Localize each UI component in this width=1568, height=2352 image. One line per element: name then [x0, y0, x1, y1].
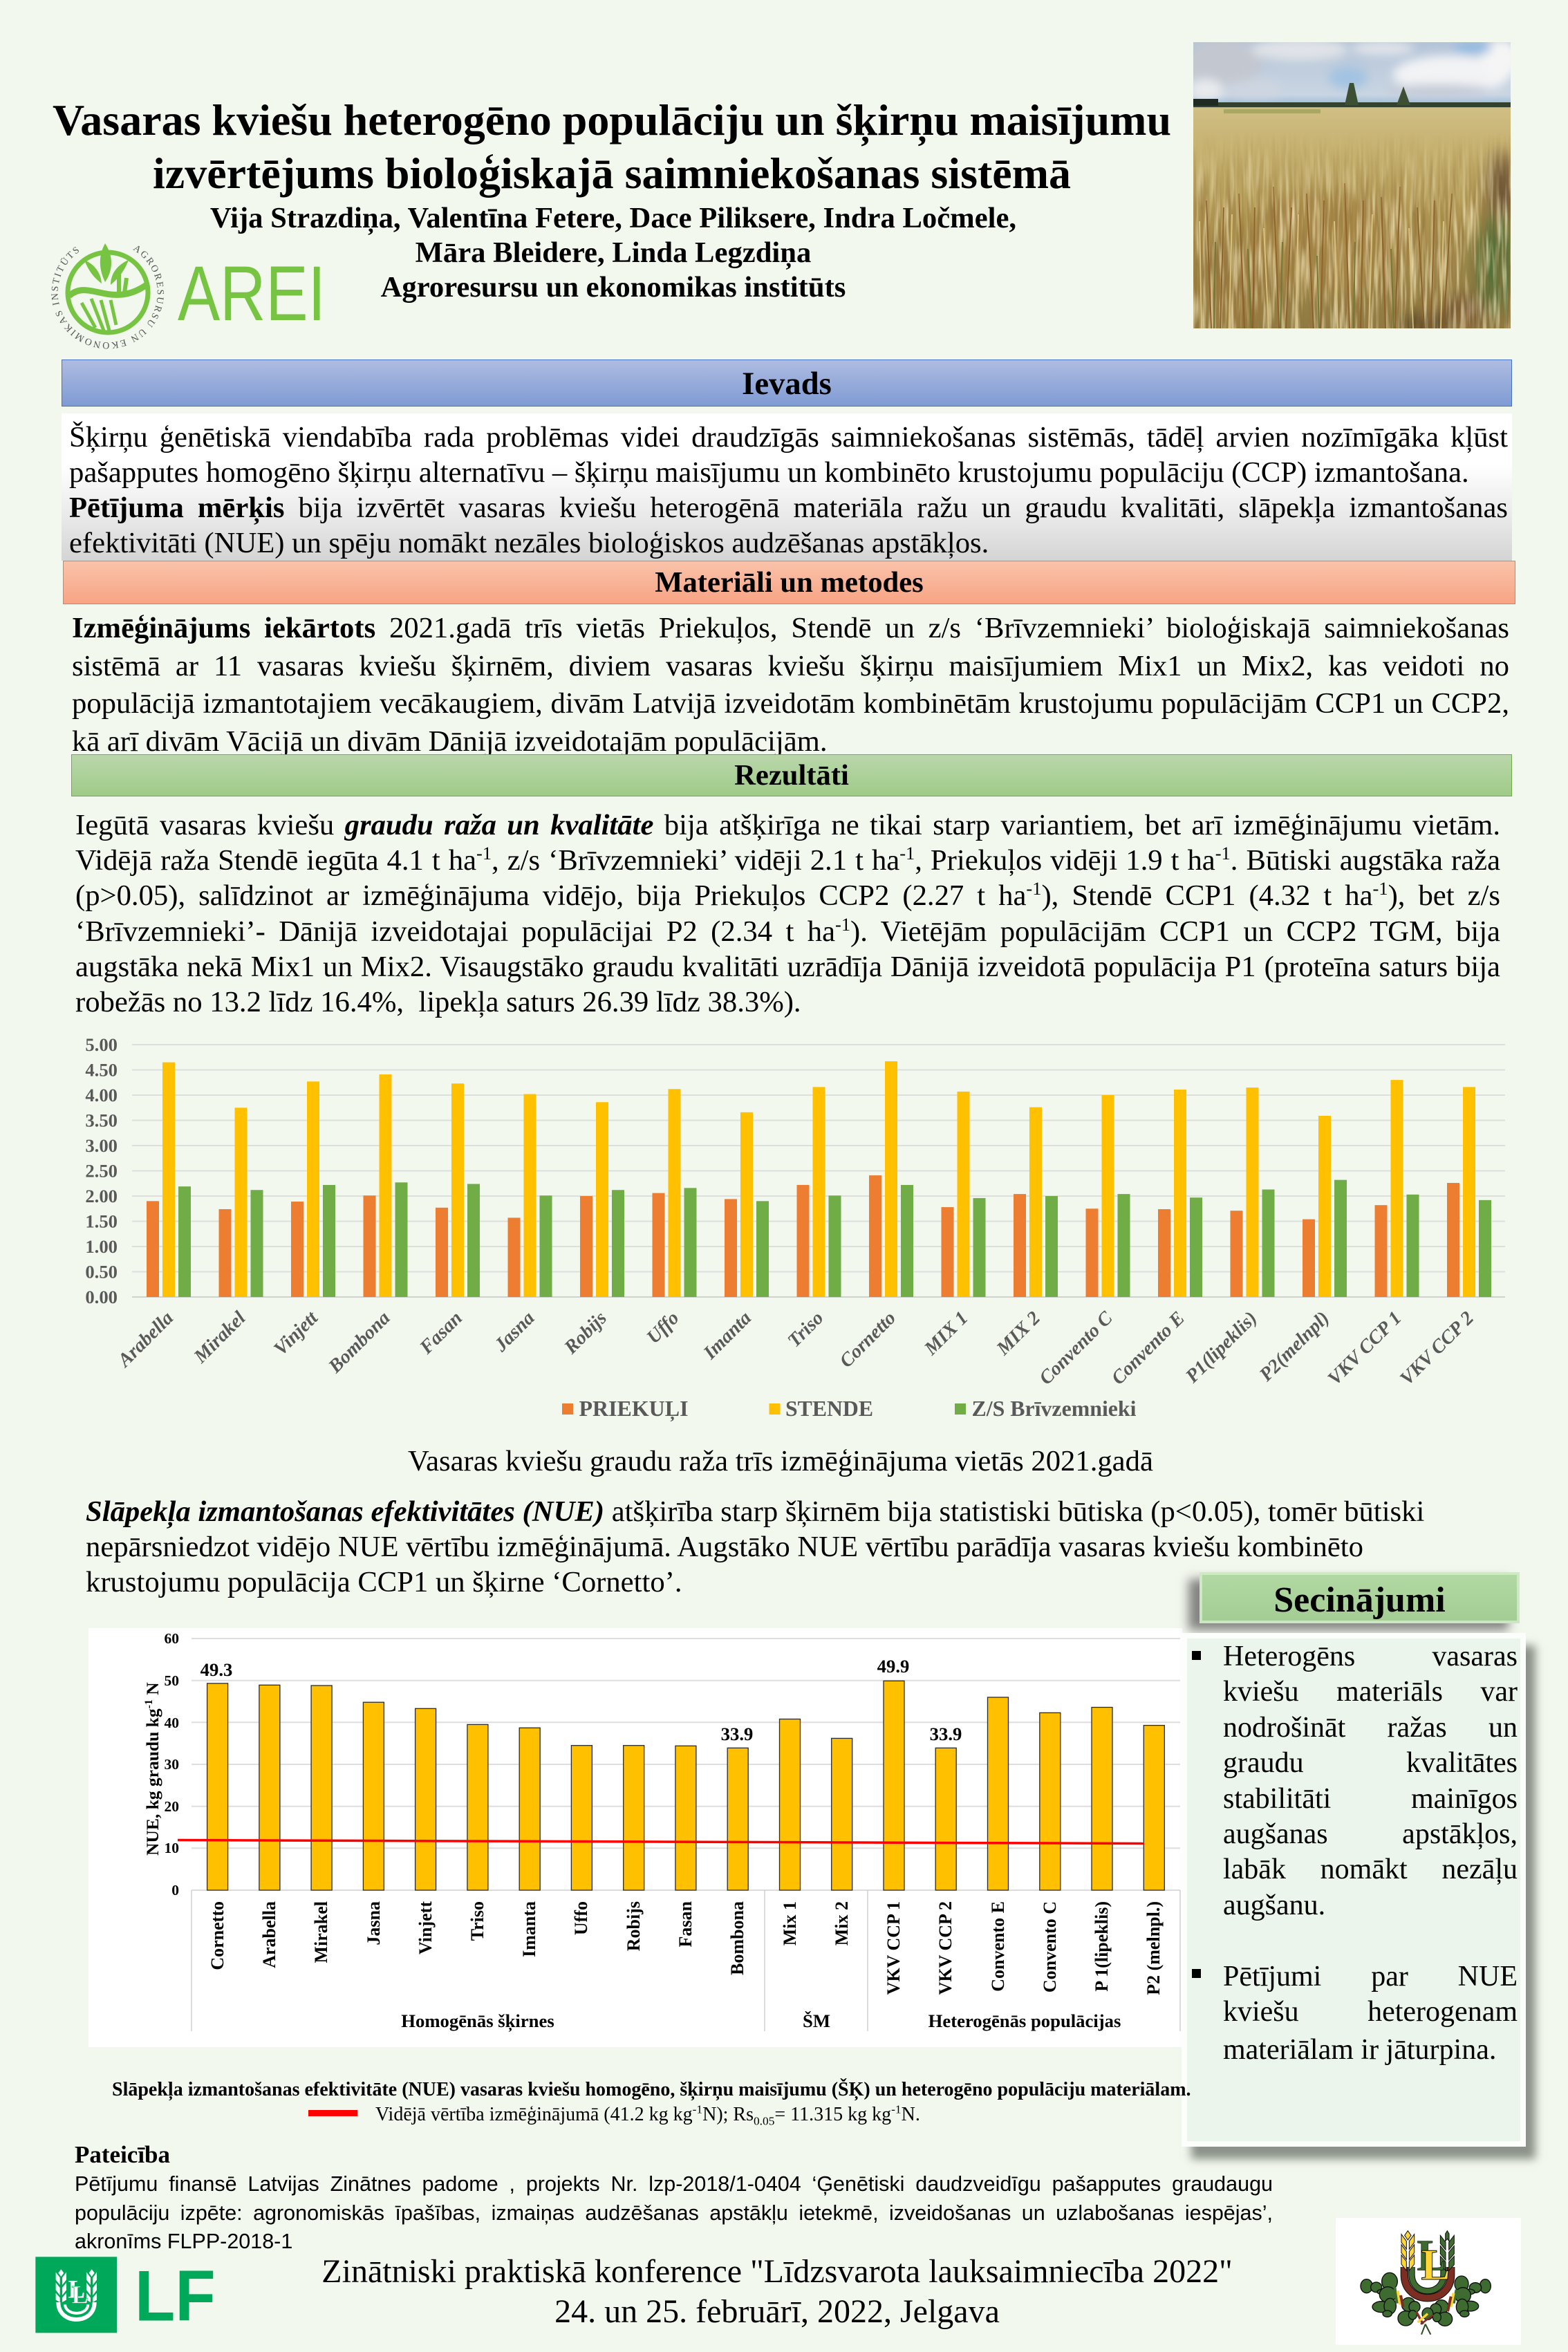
group labels: Heterogēnās populācijas	[928, 2010, 1121, 2031]
panel: Ievads heading: Ievads	[742, 366, 832, 402]
icon: LLU crest: L	[1421, 2241, 1450, 2289]
wheat ears	[1401, 2231, 1415, 2270]
caption: yield chart: Vasaras kviešu graudu raža trīs izmēģinājuma vietās 2021.gadā	[408, 1445, 1153, 1477]
ribbon	[1394, 2287, 1457, 2335]
y axis tick labels	[85, 1034, 118, 1307]
conclusions text: nodrošināt ražas un	[1223, 1712, 1518, 1744]
text: conference: Zinātniski praktiskā konference "Līdzsvarota lauksaimniecība 2022"	[321, 2253, 1233, 2290]
y axis tick labels: 30	[165, 1756, 179, 1773]
panel: Rezultāti heading: Rezultāti	[734, 759, 849, 792]
icon: AREI logo: AREI	[178, 250, 326, 337]
panel: Ievads text	[62, 413, 1512, 561]
panel: Ievads text: Šķirņu ģenētiskā viendabība rada problēmas videi draudzīgās saimniekošanas sistēmās, tādēļ arvien nozīmīgāka kļūst	[69, 421, 1508, 454]
legend: mean value text: Vidējā vērtība izmēģinājumā (41.2 kg kg-1N); Rs0.05= 11.315 kg kg-1N.	[375, 2103, 920, 2128]
category labels: Convento E	[988, 1901, 1008, 1992]
conclusions text: kviešu heterogenam	[1223, 1996, 1518, 2028]
title: Vasaras kviešu heterogēno populāciju un šķirņu maisījumu	[53, 95, 1171, 144]
category labels: Fasan	[675, 1901, 696, 1947]
y axis tick labels: 60	[165, 1630, 179, 1647]
category labels: Mirakel	[311, 1901, 331, 1963]
y axis tick labels: 1.00	[85, 1236, 118, 1257]
data labels: 33.9	[930, 1724, 962, 1744]
caption: NUE chart: Slāpekļa izmantošanas efektivitāte (NUE) vasaras kviešu homogēno, šķirņu maisījumu (ŠĶ) un heterogēno populāciju materiālam.	[112, 2079, 1191, 2100]
category labels: VKV CCP 1	[1324, 1307, 1406, 1390]
y axis tick labels: 0.00	[85, 1287, 118, 1307]
y axis title: -1	[143, 1699, 155, 1708]
category labels: Convento E	[1108, 1307, 1189, 1389]
category labels: MIX 2	[992, 1307, 1045, 1360]
conclusions text: graudu kvalitātes	[1223, 1747, 1518, 1779]
y axis title: NUE, kg graudu kg	[142, 1708, 162, 1856]
y axis tick labels: 1.50	[85, 1211, 118, 1232]
category labels: Convento C	[1040, 1901, 1060, 1992]
category labels: Fasan	[416, 1307, 467, 1359]
y axis tick labels: 0.50	[85, 1261, 118, 1282]
text: Rezultāti body: (p>0.05), salīdzinot ar izmēģinājuma vidējo, bija Priekuļos CCP2 (2.27 t ha-1), Stendē CCP1 (4.32 t ha-1), bet z/s	[75, 878, 1500, 912]
category labels: VKV CCP 2	[935, 1901, 955, 1995]
panel: NUE chart background	[88, 1628, 1182, 2047]
bars	[207, 1681, 1164, 1890]
category labels: Jasna	[489, 1307, 539, 1356]
panel: Ievads heading	[62, 360, 1512, 407]
y axis tick labels: 10	[165, 1840, 179, 1856]
icon: LF logo	[35, 2257, 216, 2337]
text: acknowledgement: Pētījumu finansē Latvijas Zinātnes padome , projekts Nr. lzp-2018/1-0404 ‘Ģenētiski daudzveidīgu pašapputes graudaugu	[75, 2172, 1273, 2196]
y axis tick labels: 50	[165, 1672, 179, 1689]
category labels	[207, 1901, 1164, 1995]
text: Materiāli un metodes body: kā arī divām Vācijā un divām Dānijā izveidotajām populācijām.	[72, 725, 828, 758]
bar chart: nitrogen use efficiency	[142, 1630, 1181, 2033]
text: conference: 24. un 25. februārī, 2022, Jelgava	[554, 2293, 1000, 2330]
conclusions text: materiālam ir jāturpina.	[1223, 2034, 1496, 2066]
conclusions text: Pētījumi par NUE	[1223, 1961, 1518, 1992]
panel: Secinājumi heading: Secinājumi	[1273, 1580, 1446, 1620]
text: NUE paragraph	[86, 1495, 1424, 1598]
panel: Secinājumi body	[1182, 1633, 1525, 2147]
y axis tick labels: 5.00	[85, 1034, 118, 1055]
y axis tick labels: 4.50	[85, 1059, 118, 1080]
authors and institute	[210, 202, 1016, 304]
category labels: Arabella	[113, 1307, 178, 1372]
bars	[147, 1061, 1491, 1297]
mean line	[178, 1840, 1144, 1843]
panel: Secinājumi heading	[1200, 1572, 1520, 1623]
y axis tick labels: 2.50	[85, 1160, 118, 1181]
legend: mean line swatch	[308, 2110, 357, 2116]
y axis title: N	[142, 1682, 162, 1699]
category labels: P2 (melnpl.)	[1144, 1901, 1164, 1995]
data labels: 33.9	[721, 1724, 753, 1744]
panel: Materiāli un metodes heading	[63, 561, 1515, 604]
category labels: P2(melnpl)	[1255, 1307, 1334, 1386]
category labels: Uffo	[642, 1307, 683, 1348]
conclusions text: augšanas apstākļos,	[1223, 1818, 1518, 1850]
category labels: Jasna	[364, 1901, 384, 1945]
icon: LF logo: L	[71, 2281, 88, 2309]
authors and institute: Vija Strazdiņa, Valentīna Fetere, Dace Piliksere, Indra Ločmele,	[210, 202, 1016, 234]
y axis tick labels: 3.50	[85, 1110, 118, 1131]
panel: Ievads text: efektivitāti (NUE) un spēju nomākt nezāles bioloģiskos audzēšanas apstākļos.	[69, 527, 989, 559]
category labels: Mix 1	[780, 1901, 800, 1945]
category labels: Arabella	[259, 1901, 279, 1968]
text: acknowledgement	[75, 2172, 1273, 2253]
heading: Pateicība: Pateicība	[75, 2141, 170, 2168]
category labels: Triso	[783, 1307, 828, 1352]
legend	[562, 1396, 1137, 1421]
category labels: MIX 1	[920, 1307, 972, 1360]
photo: wheat field	[1193, 42, 1511, 328]
y axis tick labels: 0	[171, 1882, 179, 1898]
category labels: Uffo	[571, 1901, 591, 1935]
icon: LF logo: L	[68, 2275, 85, 2303]
text: acknowledgement: populāciju izpēte: agronomiskās īpašības, izmaiņas audzēšanas apstākļu ietekmē, izveidošanas un uzlabošanas iespējas’,	[75, 2201, 1273, 2225]
y axis tick labels: 40	[165, 1715, 179, 1731]
group labels: ŠM	[803, 2010, 830, 2031]
conclusions text: stabilitāti mainīgos	[1223, 1783, 1518, 1815]
title	[53, 95, 1171, 198]
authors and institute: Māra Bleidere, Linda Legzdiņa	[416, 236, 811, 269]
text: Rezultāti body: robežās no 13.2 līdz 16.4%, lipekļa saturs 26.39 līdz 38.3%).	[75, 986, 801, 1018]
category labels: Bombona	[324, 1307, 394, 1378]
category labels: VKV CCP 1	[884, 1901, 904, 1995]
text: Materiāli un metodes body	[72, 612, 1509, 758]
y axis tick labels: 4.00	[85, 1085, 118, 1105]
icon: AREI logo: AGRORESURSU UN EKONOMIKAS INSTITŪTS	[51, 246, 164, 348]
letters: L	[1417, 2231, 1446, 2279]
category labels: Triso	[467, 1901, 487, 1941]
icon: LF logo: LF	[135, 2257, 216, 2337]
bar chart: grain yield at three sites	[85, 1034, 1505, 1421]
group labels	[401, 2010, 1121, 2033]
bullet 2	[1192, 1969, 1201, 1978]
bullet 1	[1192, 1651, 1201, 1660]
category labels: Mirakel	[189, 1307, 250, 1368]
panel: Rezultāti heading	[71, 754, 1512, 796]
conclusions text: Heterogēns vasaras	[1223, 1641, 1518, 1672]
icon: LLU crest	[1336, 2218, 1521, 2345]
y axis tick labels: 3.00	[85, 1135, 118, 1156]
category labels: Cornetto	[836, 1307, 900, 1372]
authors and institute: Agroresursu un ekonomikas institūts	[381, 271, 846, 304]
text: Rezultāti body: Iegūtā vasaras kviešu graudu raža un kvalitāte bija atšķirīga ne tikai starp variantiem, bet arī izmēģinājumu vietām.	[75, 809, 1500, 841]
category labels: Cornetto	[207, 1901, 227, 1970]
text: NUE paragraph: Slāpekļa izmantošanas efektivitātes (NUE) atšķirība starp šķirnēm bija statistiski būtiska (p<0.05), tomēr būtiski	[86, 1495, 1424, 1528]
text: conference	[321, 2253, 1233, 2330]
text: Rezultāti body	[75, 809, 1500, 1018]
category labels: P1(lipeklis)	[1181, 1307, 1261, 1388]
category labels	[113, 1307, 1478, 1390]
conclusions text: kviešu materiāls var	[1223, 1676, 1518, 1708]
category labels: Robijs	[560, 1307, 611, 1359]
text: NUE paragraph: nepārsniedzot vidējo NUE vērtību izmēģinājumā. Augstāko NUE vērtību parādīja vasaras kviešu kombinēto	[86, 1531, 1363, 1563]
data labels	[200, 1656, 962, 1744]
text: Materiāli un metodes body: populācijā izmantotajiem vecākaugiem, divām Latvijā izveidotām kombinētām krustojumu populācijām CCP1 un CCP2,	[72, 687, 1509, 720]
category labels: P 1(lipeklis)	[1092, 1901, 1112, 1992]
category labels: Vinjett	[270, 1307, 323, 1360]
text: acknowledgement: akronīms FLPP-2018-1	[75, 2230, 292, 2253]
data labels: 49.3	[200, 1659, 232, 1680]
icon: AREI logo	[51, 243, 326, 348]
category labels: Convento C	[1035, 1307, 1117, 1389]
category labels: Mix 2	[832, 1901, 852, 1945]
category labels: Imanta	[519, 1901, 539, 1957]
text: NUE paragraph: krustojumu populācija CCP1 un šķirne ‘Cornetto’.	[86, 1566, 682, 1598]
category labels: Bombona	[727, 1901, 747, 1975]
category labels: Imanta	[699, 1307, 756, 1364]
conclusions text: labāk nomākt nezāļu	[1223, 1854, 1518, 1885]
text: Rezultāti body: ‘Brīvzemnieki’- Dānijā izveidotajai populācijai P2 (2.34 t ha-1). Vietējām populācijām CCP1 un CCP2 TGM, bija	[75, 913, 1500, 948]
panel: Materiāli un metodes heading: Materiāli un metodes	[655, 566, 924, 599]
conclusions text	[1223, 1641, 1518, 2066]
title: izvērtējums bioloģiskajā saimniekošanas sistēmā	[153, 149, 1071, 198]
category labels: VKV CCP 2	[1396, 1307, 1478, 1390]
y axis tick labels: 2.00	[85, 1186, 118, 1206]
oak leaves	[1361, 2272, 1491, 2326]
y axis tick labels: 20	[165, 1798, 179, 1815]
data labels: 49.9	[877, 1656, 909, 1677]
legend: Z/S Brīvzemnieki	[972, 1396, 1137, 1421]
category labels: Vinjett	[416, 1901, 436, 1954]
U arcs	[1404, 2267, 1451, 2298]
text: Materiāli un metodes body: sistēmā ar 11 vasaras kviešu šķirnēm, diviem vasaras kviešu šķirņu maisījumiem Mix1 un Mix2, kas veidoti no	[72, 650, 1509, 682]
panel: Ievads text: Pētījuma mērķis bija izvērtēt vasaras kviešu heterogēnā materiāla ražu un graudu kvalitāti, slāpekļa izmantošanas	[69, 492, 1508, 524]
text: Rezultāti body: Vidējā raža Stendē iegūta 4.1 t ha-1, z/s ‘Brīvzemnieki’ vidēji 2.1 t ha-1, Priekuļos vidēji 1.9 t ha-1. Būtiski augstāka raža	[75, 843, 1500, 877]
category labels: Robijs	[624, 1901, 644, 1951]
text: Rezultāti body: augstāka nekā Mix1 un Mix2. Visaugstāko graudu kvalitāti uzrādīja Dānijā izveidotā populācija P1 (proteīna saturs bija	[75, 951, 1500, 983]
group labels: Homogēnās šķirnes	[401, 2010, 554, 2033]
panel: Ievads text: pašapputes homogēno šķirņu alternatīvu – šķirņu maisījumu un kombinēto krustojumu populāciju (CCP) izmantošana.	[69, 456, 1469, 489]
conclusions text: augšanu.	[1223, 1889, 1325, 1921]
legend: PRIEKUĻI	[579, 1396, 689, 1421]
text: Materiāli un metodes body: Izmēģinājums iekārtots 2021.gadā trīs vietās Priekuļos, Stendē un z/s ‘Brīvzemnieki’ bioloģiskajā saimniekošanas	[72, 612, 1509, 644]
y axis tick labels	[165, 1630, 179, 1898]
legend: STENDE	[785, 1396, 873, 1421]
